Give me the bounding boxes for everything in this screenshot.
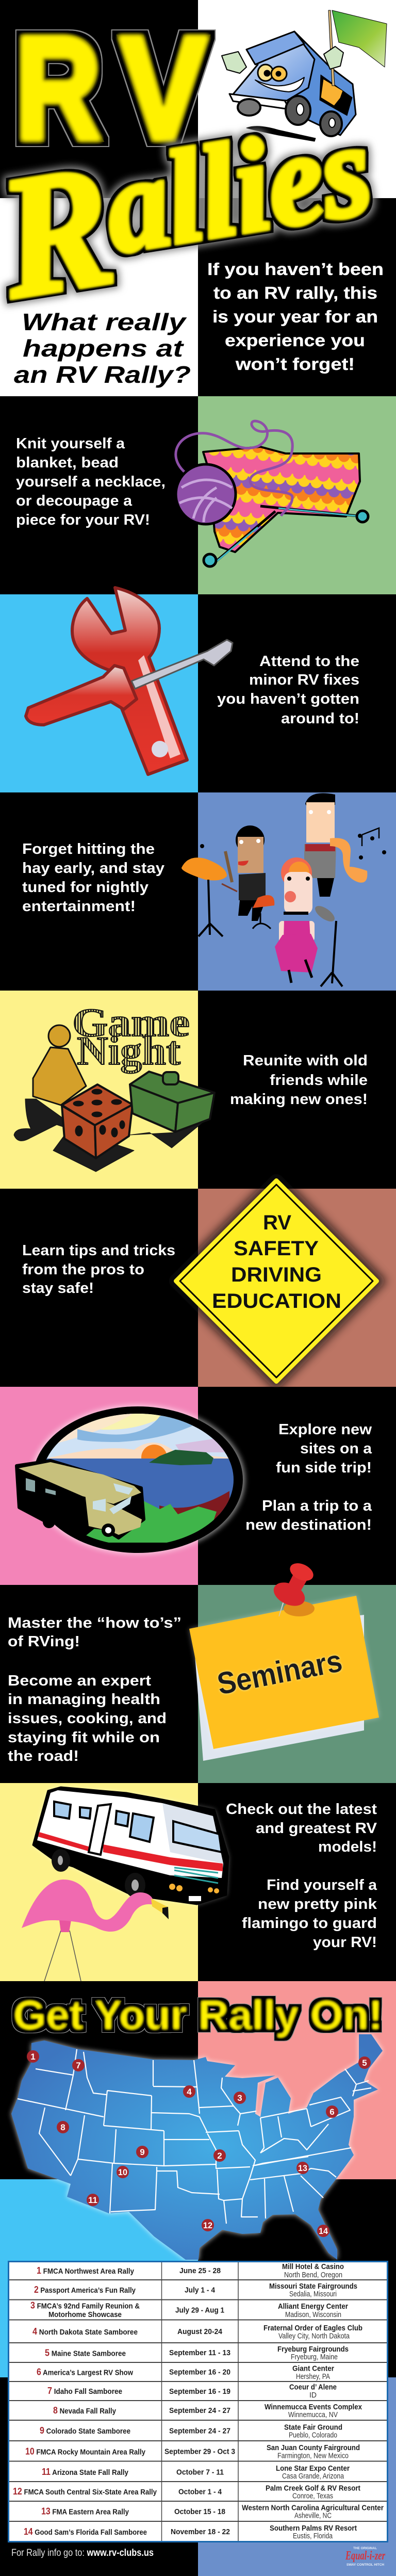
table rows: venues: Winnemucca, NV [288, 2410, 338, 2419]
heading: Get Your Rally On!: Get Your Rally On! [13, 1992, 383, 2038]
text block: reunite: Reunite with old [243, 1052, 368, 1069]
table rows: rally names: 12 FMCA South Central Six-State Area Rally [13, 2486, 157, 2497]
table rows: venues: Western North Carolina Agricultural Center [242, 2503, 384, 2513]
text block: latest models: flamingo to guard [242, 1915, 377, 1932]
text block: side trips: new destination! [245, 1517, 372, 1533]
text block: safety tips: Learn tips and tricks [22, 1242, 175, 1259]
icon: pink flamingo [22, 1880, 169, 1981]
map pins: 7 [76, 2061, 81, 2070]
text block: how to's: in managing health [8, 1691, 160, 1708]
text block: how to's: of RVing! [8, 1633, 80, 1650]
text block: what really happens: happens at [23, 335, 184, 362]
logo: Equal-i-zer: SWAY CONTROL HITCH [346, 2563, 384, 2567]
table rows: venues: Conroe, Texas [292, 2492, 333, 2500]
text block: latest models: and greatest RV [256, 1820, 377, 1837]
table rows: venues: North Bend, Oregon [284, 2271, 342, 2279]
icon: safety driving education road sign: RV [263, 1211, 291, 1234]
table rows: venues: Southern Palms RV Resort [270, 2524, 357, 2533]
text block: how to's: staying fit while on [8, 1729, 160, 1746]
map pins [27, 2050, 371, 2237]
icon: safety driving education road sign: SAFETY [234, 1237, 319, 1260]
title: RV: R [16, 8, 101, 169]
text block: how to's: the road! [8, 1748, 79, 1764]
table rows: venues: Alliant Energy Center [278, 2302, 348, 2311]
text block: RV fixes [217, 653, 359, 727]
text block: intro: to an RV rally, this [213, 283, 377, 302]
map pins: 8 [60, 2123, 65, 2132]
text block: RV fixes: minor RV fixes [249, 672, 359, 688]
icon: knitting and yarn ball [176, 421, 368, 566]
text block: latest models: your RV! [313, 1934, 377, 1951]
text block: intro [207, 260, 384, 374]
map pins: 4 [187, 2087, 192, 2097]
heading: Game Night: Night [77, 1028, 180, 1073]
table rows: dates: October 7 - 11 [176, 2468, 224, 2476]
table rows: venues: Farmington, New Mexico [277, 2452, 349, 2460]
text block: crafts: yourself a necklace, [16, 474, 166, 490]
text block: entertainment: entertainment! [22, 898, 136, 915]
text block: entertainment: Forget hitting the [22, 841, 155, 857]
table rows: venues: Coeur d’ Alene [289, 2383, 337, 2392]
text block: crafts: Knit yourself a [16, 435, 125, 452]
title: RV [16, 8, 207, 169]
text block: side trips: Explore new [278, 1421, 372, 1438]
text block: reunite [230, 1052, 368, 1108]
text block: intro: experience you [225, 331, 365, 350]
footer: rally info link: For Rally info go to: www.rv-clubs.us [11, 2548, 154, 2558]
table rows: venues: San Juan County Fairground [267, 2443, 360, 2452]
table rows: dates: June 25 - 28 [179, 2266, 221, 2275]
table rows: venues: Mill Hotel & Casino [282, 2262, 344, 2271]
table rows: rally names: 14 Good Sam’s Florida Fall Samboree [24, 2526, 147, 2537]
text block: RV fixes: Attend to the [259, 653, 359, 670]
table rows: rally names: 9 Colorado State Samboree [40, 2425, 130, 2436]
icon: seminars note with push pin [189, 1560, 379, 1761]
icon: safety driving education road sign: DRIVING [231, 1263, 322, 1286]
table rows: rally names [13, 2265, 157, 2537]
text block: latest models: models! [318, 1839, 377, 1855]
table rows: rally names: Motorhome Showcase [48, 2310, 122, 2319]
table rows: rally names: 6 America’s Largest RV Show [37, 2367, 133, 2377]
text block: how to's [8, 1615, 182, 1764]
table rows: rally names: 7 Idaho Fall Samboree [47, 2386, 122, 2396]
text block: what really happens: What really [22, 309, 187, 335]
text block: RV fixes: around to! [281, 710, 359, 727]
map pins: 6 [329, 2107, 335, 2117]
icon: game night pieces [14, 1025, 214, 1172]
map pins: 1 [30, 2052, 36, 2062]
table rows: dates: September 16 - 20 [169, 2368, 230, 2376]
text block: intro: is your year for an [212, 307, 378, 326]
text block: latest models: new pretty pink [258, 1896, 377, 1913]
text block: side trips: sites on a [300, 1440, 372, 1457]
map pins: 3 [237, 2093, 242, 2103]
text block: latest models: Find yourself a [267, 1877, 377, 1893]
text block: latest models [226, 1801, 377, 1951]
table rows: dates: September 11 - 13 [169, 2348, 230, 2357]
table rows: dates: September 24 - 27 [169, 2427, 230, 2435]
map pins: 14 [319, 2226, 328, 2236]
icon: band of musicians [182, 793, 386, 986]
table rows: dates: October 1 - 4 [178, 2488, 222, 2496]
text block: crafts: piece for your RV! [16, 512, 150, 528]
text block: crafts: or decoupage a [16, 493, 133, 509]
table rows: venues: Fraternal Order of Eagles Club [263, 2324, 362, 2332]
text block: safety tips: stay safe! [22, 1280, 94, 1297]
text block: side trips: Plan a trip to a [262, 1498, 372, 1514]
table rows: dates: October 15 - 18 [174, 2507, 225, 2516]
text block: side trips [245, 1421, 372, 1533]
table rows: dates: September 24 - 27 [169, 2406, 230, 2415]
icon: safety driving education road sign: EDUCATION [212, 1290, 341, 1313]
text block: intro: If you haven’t been [207, 260, 384, 279]
table rows: dates: November 18 - 22 [171, 2528, 230, 2536]
text block: reunite: making new ones! [230, 1091, 368, 1108]
icon: safety driving education road sign [166, 1171, 387, 1391]
icon: seminars note with push pin: Seminars [214, 1643, 345, 1702]
table rows: venues: Pueblo, Colorado [289, 2431, 337, 2439]
table rows: rally names: 4 North Dakota State Samboree [32, 2326, 138, 2337]
map pins: 9 [140, 2147, 145, 2157]
text block: safety tips [22, 1242, 175, 1297]
table rows: venues: Eustis, Florida [293, 2532, 333, 2540]
text block: RV fixes: you haven’t gotten [217, 691, 359, 707]
text block: entertainment: hay early, and stay [22, 860, 164, 877]
text block: what really happens [14, 309, 191, 388]
map pins: 11 [88, 2195, 97, 2205]
text block: reunite: friends while [270, 1072, 368, 1089]
table rows: venues: Valley City, North Dakota [278, 2332, 350, 2340]
table: rally schedule [8, 2261, 388, 2542]
table rows: venues [242, 2262, 384, 2540]
table rows: venues: Giant Center [292, 2364, 334, 2373]
map pins: 12 [203, 2221, 212, 2230]
table rows: dates [164, 2266, 235, 2536]
table rows: venues: Hershey, PA [296, 2372, 330, 2381]
table rows: dates: August 20-24 [177, 2327, 223, 2336]
table rows: venues: ID [309, 2391, 317, 2400]
table rows: dates: September 29 - Oct 3 [164, 2448, 235, 2456]
table rows: rally names: 2 Passport America’s Fun Rally [34, 2285, 136, 2295]
text block: what really happens: an RV Rally? [14, 361, 191, 388]
table rows: rally names: 5 Maine State Samboree [45, 2347, 126, 2358]
text block: intro: won’t forget! [235, 354, 355, 374]
logo: Equal-i-zer: THE ORIGINAL [353, 2547, 377, 2550]
table rows: dates: July 29 - Aug 1 [175, 2306, 224, 2314]
icon: wrench and screwdriver [26, 588, 233, 774]
title: Rallies: allies [95, 95, 380, 281]
table rows: venues: Winnemucca Events Complex [265, 2403, 362, 2411]
table rows: rally names: 11 Arizona State Fall Rally [42, 2467, 129, 2477]
text block: how to's: Master the “how to’s” [8, 1615, 182, 1631]
text block: safety tips: from the pros to [22, 1261, 144, 1278]
table rows: venues: Lone Star Expo Center [276, 2464, 350, 2473]
table rows: venues: Palm Creek Golf & RV Resort [266, 2484, 360, 2493]
heading: Game Night [72, 1000, 190, 1073]
logo: Equal-i-zer [345, 2547, 385, 2567]
text block: side trips: fun side trip! [276, 1460, 372, 1476]
table rows: venues: State Fair Ground [284, 2423, 342, 2432]
table rows: dates: July 1 - 4 [185, 2286, 216, 2295]
text block: entertainment [22, 841, 164, 915]
text block: how to's: issues, cooking, and [8, 1710, 167, 1727]
table rows: venues: Missouri State Fairgrounds [269, 2282, 357, 2291]
icon: waving RV mascot with green flag [222, 10, 387, 141]
table rows: rally names: 3 FMCA’s 92nd Family Reunion & [30, 2300, 140, 2310]
title: Rallies [0, 87, 386, 335]
table rows: venues: Casa Grande, Arizona [282, 2472, 344, 2481]
text block: how to's: Become an expert [8, 1673, 151, 1689]
table rows: venues: Fryeburg Fairgrounds [277, 2345, 349, 2354]
table rows: dates: September 16 - 19 [169, 2387, 230, 2396]
map pins: 5 [362, 2058, 367, 2068]
table rows: venues: Sedalia, Missouri [289, 2290, 337, 2298]
heading: Game Night: Game [72, 1000, 190, 1045]
text block: crafts [16, 435, 166, 528]
map pins: 13 [298, 2163, 307, 2173]
map pins: 10 [118, 2167, 127, 2177]
icon: RV by the lake scene [16, 1402, 245, 1554]
title: RV: V [121, 8, 207, 169]
map pins: 2 [217, 2151, 222, 2161]
table rows: venues: Asheville, NC [294, 2512, 332, 2520]
text block: entertainment: tuned for nightly [22, 879, 148, 896]
table rows: rally names: 8 Nevada Fall Rally [53, 2405, 117, 2416]
table rows: venues: Madison, Wisconsin [285, 2310, 341, 2319]
table rows: rally names: 13 FMA Eastern Area Rally [41, 2506, 129, 2517]
text block: latest models: Check out the latest [226, 1801, 377, 1818]
table rows: venues: Fryeburg, Maine [291, 2353, 338, 2361]
text block: crafts: blanket, bead [16, 455, 119, 471]
icon: white motorhome [33, 1787, 228, 1904]
table rows: rally names: 1 FMCA Northwest Area Rally [37, 2265, 135, 2276]
table rows: rally names: 10 FMCA Rocky Mountain Area Rally [25, 2447, 146, 2457]
map: rally locations across the US [11, 2034, 383, 2260]
